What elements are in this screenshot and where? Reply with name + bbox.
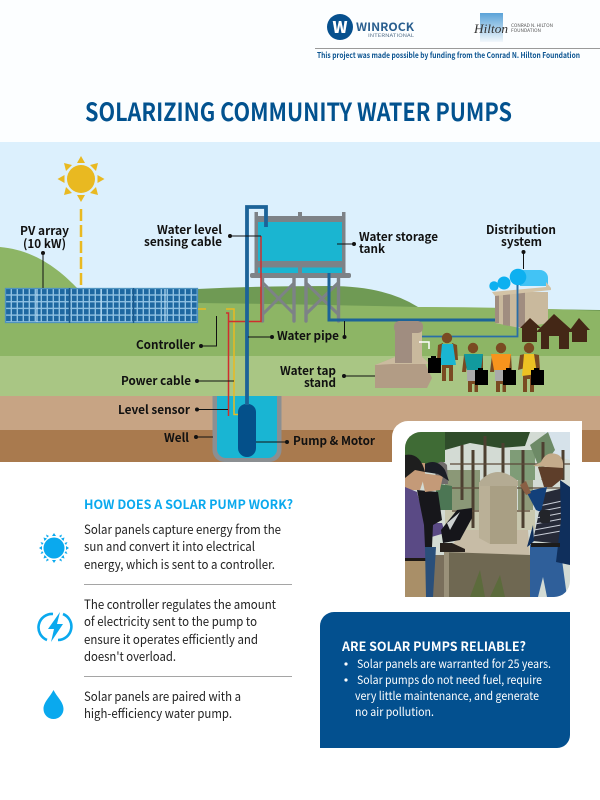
diagram labels: Pump & Motor [293,432,376,449]
bullet list: Solar pumps do not need fuel, require [357,672,542,688]
diagram labels: Well [164,429,189,446]
person 1 [428,333,458,381]
logo: Winrock International: W [333,14,348,38]
diagram labels: Power cable [121,372,191,389]
text: step 1 [84,519,281,573]
text: step 2: doesn't overload. [84,646,176,665]
diagram labels: PV array [20,222,69,239]
text: step 2: ensure it operates efficiently and [84,629,258,648]
logo: Conrad N. Hilton Foundation: Hilton [473,21,508,36]
pillar [490,482,517,544]
water tower [250,212,351,321]
sunlight beam [80,209,82,288]
text: step 3: Solar panels are paired with a [84,686,241,705]
second man [425,547,436,597]
people with water cans [428,333,544,392]
icon: lightning bolt [39,612,71,642]
diagram labels: system [501,233,542,250]
logo: Conrad N. Hilton Foundation: FOUNDATION [511,28,541,34]
diagram labels: Distribution [486,221,556,238]
ground and concrete base [433,555,444,597]
person 3 [490,343,516,392]
diagram labels: Level sensor [118,401,191,418]
text: step 3: high-efficiency water pump. [84,703,232,722]
icon: water drop [44,690,64,719]
diagram labels: Water storage [359,228,438,245]
diagram labels: (10 kW) [23,235,66,252]
diagram: solar water pump system [0,142,600,462]
diagram labels: tank [359,240,386,257]
header logos [315,13,600,61]
diagram labels [20,221,556,449]
bullet list: no air pollution. [355,704,434,720]
logo: Winrock International: WINROCK [356,19,414,35]
logo: Winrock International [327,14,414,40]
cables [198,236,261,416]
bullet list: very little maintenance, and generate [355,688,539,704]
photo frame [392,421,582,597]
text: step 2: of electricity sent to the pump to [84,611,257,630]
diagram labels: stand [304,374,336,391]
solar panels [6,288,198,323]
diagram labels: sensing cable [144,233,222,250]
photo: team at the water tap stand [405,432,570,597]
houses [520,314,590,349]
bullet list: Solar panels are warranted for 25 years. [357,656,551,672]
icon: sun [39,533,69,563]
bullet list [344,656,551,720]
diagram labels: Controller [136,336,196,353]
logo: Conrad N. Hilton Foundation: CONRAD N. HILTON [511,23,553,29]
diagram labels: Water pipe [277,327,339,344]
logo: Conrad N. Hilton Foundation [473,13,553,42]
text: step 2 [84,594,276,665]
water pipes [247,207,518,405]
callout lines [41,234,526,444]
text: step 1: Solar panels capture energy from the [84,519,281,538]
person 4 [518,343,544,392]
left man [405,463,425,490]
landscape [0,247,600,462]
text: step 2: The controller regulates the amount [84,594,276,613]
logo: Winrock International: INTERNATIONAL [368,32,414,39]
well [212,396,282,462]
diagram labels: Water level [157,221,222,238]
heading: HOW DOES A SOLAR PUMP WORK? [84,494,293,513]
text: step 1: energy, which is sent to a controller. [84,554,275,573]
text: step 3 [84,686,241,722]
text: step 1: sun and convert it into electrical [84,536,255,555]
panel: how does a solar pump work [39,494,293,722]
title: SOLARIZING COMMUNITY WATER PUMPS [85,93,512,129]
sky [0,142,600,462]
person 2 [462,343,488,392]
diagram labels: Water tap [280,362,336,379]
panel: are solar pumps reliable [320,612,570,748]
third man [435,483,452,510]
heading: ARE SOLAR PUMPS RELIABLE? [341,636,526,655]
right man [530,545,567,597]
icon: sun [58,156,104,202]
water tap stand [375,321,432,388]
well cable ends [228,396,238,416]
distribution system [489,269,551,330]
